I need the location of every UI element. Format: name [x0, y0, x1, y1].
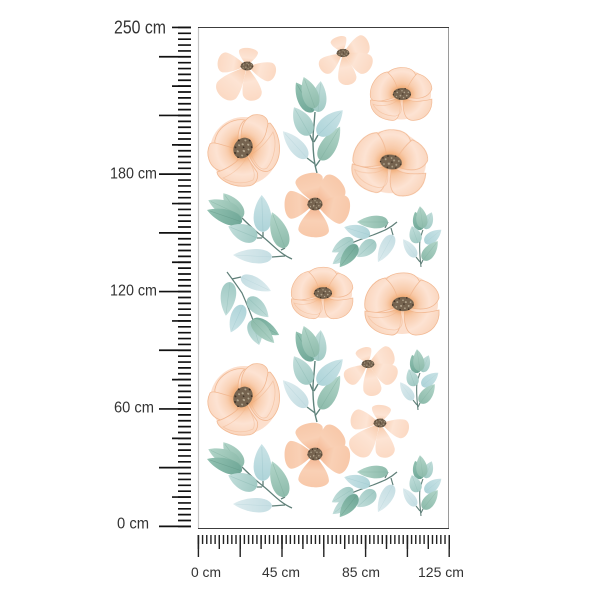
flower: lower salmon star	[284, 420, 352, 488]
leaf branch: bottom left	[205, 438, 293, 513]
flower: lower left poppy	[208, 364, 280, 435]
height labels: 250 cm	[114, 18, 166, 38]
leaf sprig: bottom right	[399, 454, 445, 516]
height labels: 0 cm	[117, 516, 149, 532]
flower: right large poppy	[365, 273, 439, 335]
flower: top right poppy	[370, 68, 432, 120]
height labels	[110, 18, 166, 532]
flower: lower right five petal	[345, 404, 411, 462]
height labels: 180 cm	[110, 166, 157, 182]
width labels: 45 cm	[262, 564, 300, 580]
width labels	[191, 564, 464, 580]
width labels: 0 cm	[191, 564, 221, 580]
flower: top left five petal	[212, 47, 278, 105]
leaf branch: left	[205, 189, 293, 264]
leaf sprig: lower centre	[277, 323, 349, 422]
leaf sprig: small lower right	[396, 348, 442, 410]
flower: right poppy	[349, 125, 431, 199]
leaf branch: hanging left	[218, 271, 282, 347]
wall sticker sheet panel	[198, 28, 449, 528]
height labels: 120 cm	[110, 282, 157, 300]
leaf sprig: upper centre	[277, 74, 349, 173]
leaf branch: centre right	[329, 216, 399, 271]
leaf sprig: small right	[399, 205, 445, 267]
flower: large left poppy	[208, 115, 280, 186]
vertical height ruler	[175, 27, 184, 528]
width labels: 125 cm	[418, 564, 464, 580]
leaf branch: bottom centre	[329, 466, 399, 521]
width labels: 85 cm	[342, 564, 380, 580]
flower: top centre five petal	[316, 33, 376, 86]
flower: salmon star	[284, 170, 352, 238]
flower: centre poppy	[291, 267, 353, 319]
horizontal width ruler	[198, 540, 451, 546]
height labels: 60 cm	[114, 400, 154, 416]
flower: lower centre five petal	[341, 344, 401, 397]
